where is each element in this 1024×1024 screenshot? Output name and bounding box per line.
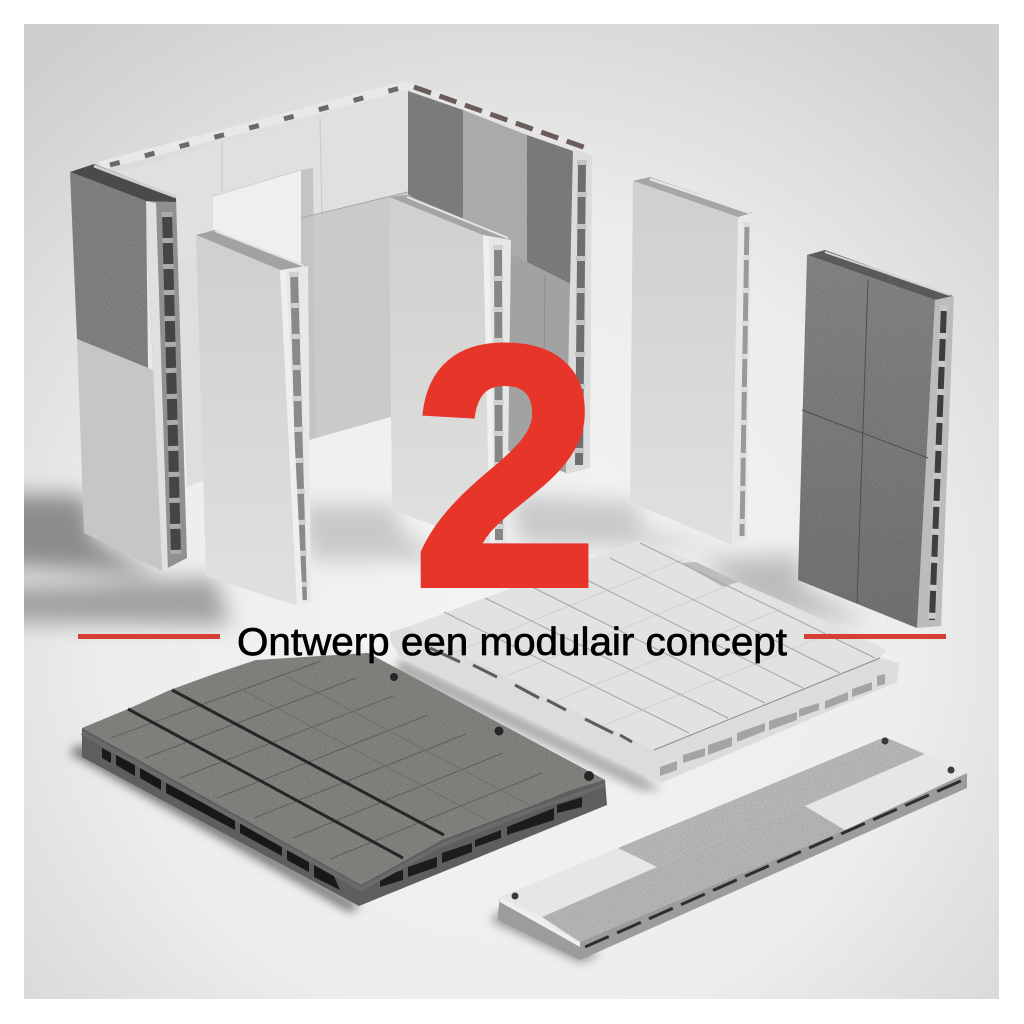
strip grey upper bbox=[618, 737, 925, 867]
dark upper face bbox=[70, 172, 148, 368]
right red rule bbox=[804, 634, 946, 639]
wall panel 3: light bbox=[389, 195, 511, 546]
panel 2 face bbox=[196, 235, 297, 606]
back room structure bbox=[100, 85, 592, 487]
right wall dark panel 1 bbox=[408, 91, 463, 228]
strip light end, lower left bbox=[500, 848, 657, 917]
thin tile lines bbox=[111, 661, 542, 859]
dark plate right openings bbox=[380, 797, 582, 887]
back wall bbox=[120, 91, 408, 487]
dark plate left openings bbox=[102, 748, 340, 890]
strip holes bbox=[882, 738, 888, 744]
panel 3 face bbox=[389, 197, 490, 546]
title: Ontwerp een modulair concept bbox=[237, 621, 787, 664]
white floor plate bbox=[390, 540, 899, 783]
lower back wall block bbox=[313, 192, 408, 438]
right wall dark panel 2 bbox=[527, 135, 573, 285]
floor shadows bbox=[0, 495, 870, 962]
wall panel 1: dark and light bbox=[70, 164, 187, 571]
panel 4 face bbox=[630, 181, 738, 545]
right wall lower panel bbox=[408, 194, 573, 473]
strip openings bbox=[585, 780, 963, 947]
dark floor plate bbox=[82, 653, 607, 906]
right wall mid panel bbox=[463, 110, 527, 262]
narrow floor strip bbox=[498, 737, 967, 960]
left lower wall block bbox=[177, 250, 213, 487]
door jamb bbox=[301, 168, 316, 442]
door opening bbox=[213, 170, 301, 482]
strip grey lower bbox=[542, 806, 845, 942]
panel 5 face bbox=[798, 255, 935, 628]
wall panel 2: light bbox=[196, 230, 311, 606]
deep grooves bbox=[128, 709, 403, 858]
wall panel 5: dark bbox=[798, 250, 954, 628]
left red rule bbox=[78, 634, 220, 639]
white plate top surface bbox=[407, 540, 887, 750]
mounting holes bbox=[390, 673, 398, 681]
strip light end, upper right bbox=[805, 754, 967, 830]
back wall top ribs bbox=[100, 85, 408, 166]
right wall top ribs bbox=[408, 85, 590, 150]
white plate left slots bbox=[430, 648, 632, 742]
big red number: 2 bbox=[412, 275, 599, 658]
light lower face bbox=[77, 339, 162, 571]
white plate front openings bbox=[660, 674, 885, 776]
right wall edge bbox=[566, 148, 592, 474]
dark plate top surface bbox=[82, 653, 605, 885]
wall panel 4: light bbox=[630, 177, 752, 545]
